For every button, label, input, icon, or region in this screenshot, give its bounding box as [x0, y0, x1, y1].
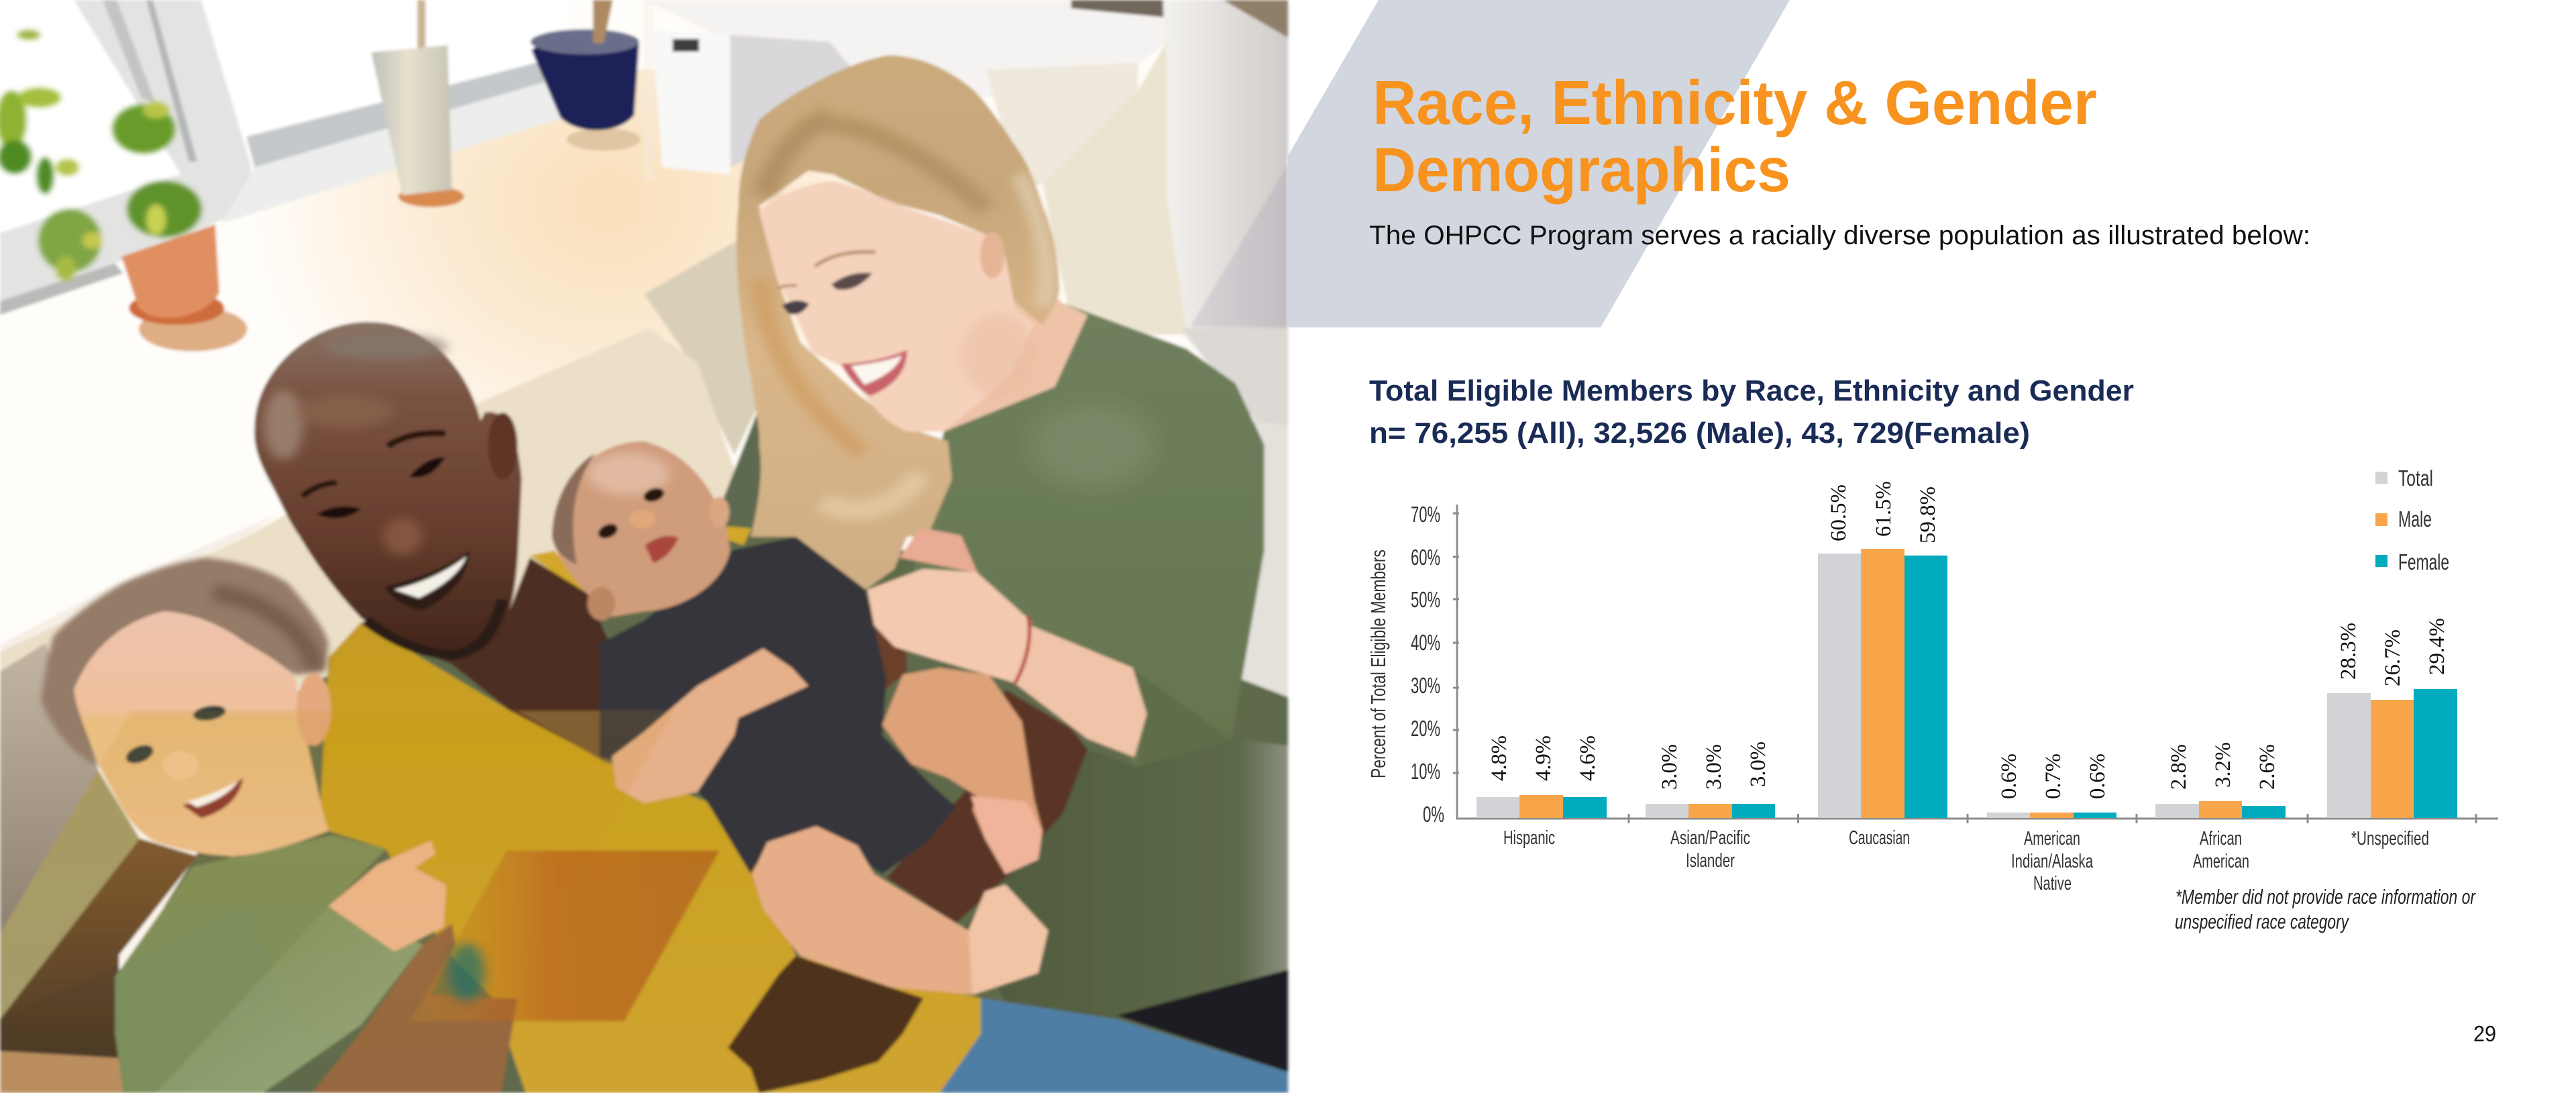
- y axis tick labels: 10%: [1411, 759, 1440, 784]
- footnote: *Member did not provide race information or: [2176, 885, 2476, 908]
- jeans and shadow: [936, 970, 1288, 1093]
- value labels: 4.9%: [1532, 735, 1556, 781]
- man head: [254, 322, 522, 658]
- value labels: 0.6%: [1997, 753, 2021, 799]
- axes and ticks: [1453, 505, 2498, 823]
- window and frame: [0, 0, 575, 315]
- baby arm: [612, 648, 808, 803]
- overlay: orange parallelogram tint: [411, 850, 720, 1021]
- category labels: Hispanic: [1503, 827, 1555, 849]
- value labels: 3.0%: [1702, 744, 1726, 790]
- sofa: [0, 240, 767, 1093]
- photo: family on sofa: [0, 0, 1288, 1093]
- man ear: [488, 413, 517, 480]
- man shirt: [321, 622, 981, 1093]
- baby lower leg: [753, 826, 1048, 995]
- woman eyes and smile: [778, 252, 907, 396]
- man lower hand: [312, 924, 517, 1093]
- value labels: 3.0%: [1746, 741, 1770, 787]
- plant and terracotta pot: [0, 30, 248, 352]
- footnote: [2175, 885, 2476, 933]
- y axis tick labels: 0%: [1423, 802, 1444, 827]
- y axis tick labels: 50%: [1411, 587, 1440, 612]
- value labels: 28.3%: [2337, 623, 2361, 680]
- value labels: 59.8%: [1916, 486, 1940, 543]
- legend: Total: [2398, 466, 2433, 490]
- legend: [2375, 466, 2449, 574]
- woman: [718, 55, 1288, 1019]
- y axis tick labels: 40%: [1411, 630, 1440, 655]
- value labels: 3.0%: [1658, 744, 1682, 790]
- bars: Asian/Pacific Islander: [1646, 804, 1775, 818]
- girl: [41, 558, 446, 1093]
- category labels: *Unspecified: [2351, 828, 2429, 849]
- girl shirt: [115, 835, 423, 1093]
- woman forearm: [1014, 625, 1146, 757]
- girl hair: [41, 558, 329, 767]
- subtitle: The OHPCC Program serves a racially diverse population as illustrated below:: [1369, 221, 2310, 250]
- baby: [552, 441, 1048, 995]
- woman shirt highlight: [1031, 405, 1154, 488]
- metal cylinder vase: [371, 0, 464, 207]
- category labels: African: [2200, 828, 2242, 849]
- man: [254, 322, 1087, 1093]
- baby onesie: [600, 537, 956, 874]
- baby hair edge: [552, 453, 596, 565]
- baby face: [595, 485, 678, 563]
- man neck and chest: [411, 558, 612, 760]
- woman shirt behind hair: [718, 387, 813, 537]
- woman ear: [980, 232, 1005, 278]
- category labels: Islander: [1686, 850, 1735, 872]
- y axis title: Percent of Total Eligible Members: [1366, 550, 1390, 778]
- man forearm: [886, 689, 1087, 924]
- value labels: 4.8%: [1487, 735, 1511, 781]
- title: Demographics: [1373, 135, 1790, 205]
- category labels: Asian/Pacific: [1670, 827, 1750, 849]
- baby forehead highlight: [588, 453, 669, 495]
- value labels: 0.6%: [2086, 753, 2110, 799]
- bars: American Indian/Alaska Native: [1987, 813, 2116, 818]
- navy flower pot: [531, 0, 641, 150]
- woman face: [759, 181, 1034, 431]
- overlay: gold chevron tint: [0, 711, 674, 1093]
- value labels: 60.5%: [1827, 484, 1851, 541]
- chart heading: [1369, 374, 2134, 450]
- baby lower foot: [969, 884, 1048, 995]
- y axis tick labels: 20%: [1411, 716, 1440, 741]
- woman skirt area: [965, 739, 1288, 1019]
- overlay: teal glow: [449, 943, 484, 1002]
- legend: Male: [2398, 507, 2432, 531]
- category labels: [1503, 827, 2429, 894]
- girl neck: [230, 753, 329, 857]
- woman neck: [928, 237, 1087, 431]
- category labels: American: [2193, 851, 2249, 872]
- bars: Unspecified: [2327, 689, 2457, 818]
- footnote: unspecified race category: [2175, 910, 2350, 933]
- woman hair shading: [760, 119, 1046, 511]
- baby upper foot: [971, 796, 1042, 874]
- value labels: 0.7%: [2041, 753, 2065, 799]
- y axis tick labels: 70%: [1411, 502, 1440, 527]
- baby upper leg: [882, 668, 1042, 874]
- girl hand: [329, 841, 446, 951]
- value labels: 4.6%: [1576, 735, 1600, 781]
- white appliance and back wall: [644, 0, 1288, 181]
- woman sleeve cuff: [1133, 669, 1232, 767]
- girl eyes and smile: [122, 703, 243, 819]
- value labels: 61.5%: [1872, 481, 1896, 537]
- shirt shoulder: [530, 551, 592, 596]
- category labels: Native: [2033, 873, 2072, 894]
- man eyes and smile: [303, 433, 502, 656]
- value labels: 26.7%: [2381, 629, 2405, 686]
- value labels: [1487, 481, 2449, 799]
- woman neck shade: [961, 314, 1035, 397]
- girl sleeve: [156, 906, 423, 1093]
- grey parallelogram behind title: [1288, 0, 1790, 327]
- y axis tick labels: [1411, 502, 1444, 827]
- dark gap behind hand: [862, 593, 907, 693]
- woman shirt: [904, 303, 1265, 767]
- value labels: 2.8%: [2167, 744, 2191, 790]
- man forehead highlights: [264, 335, 447, 555]
- value labels: 2.6%: [2255, 744, 2279, 790]
- chart heading: Total Eligible Members by Race, Ethnicity and Gender: [1369, 374, 2134, 407]
- woman hair: [737, 55, 1059, 590]
- bars: Hispanic: [1477, 795, 1607, 818]
- chart heading: n= 76,255 (All), 32,526 (Male), 43, 729(Female): [1369, 417, 2030, 450]
- bars: African American: [2155, 801, 2286, 818]
- overlay: grey band over photo: [1190, 164, 1288, 327]
- value labels: 29.4%: [2425, 618, 2449, 675]
- title: Race, Ethnicity & Gender: [1373, 68, 2097, 138]
- man hand: [728, 955, 923, 1093]
- woman hand and bracelet: [867, 527, 1032, 683]
- title: [1373, 68, 2097, 205]
- baby head: [552, 441, 731, 617]
- bars: Caucasian: [1818, 549, 1947, 818]
- girl hair dark inner: [213, 592, 316, 669]
- category labels: Indian/Alaska: [2011, 851, 2094, 872]
- chest tinted band: [517, 711, 608, 764]
- category labels: American: [2024, 828, 2080, 849]
- girl face: [74, 611, 329, 856]
- figure base fill: [123, 488, 1288, 1093]
- y axis tick labels: 60%: [1411, 545, 1440, 570]
- legend: Female: [2398, 550, 2449, 574]
- bar chart: [1366, 466, 2498, 894]
- cushions and curtain: [985, 0, 1288, 749]
- baby ears: [588, 497, 729, 621]
- y axis tick labels: 30%: [1411, 673, 1440, 698]
- girl ear: [297, 674, 331, 746]
- value labels: 3.2%: [2211, 742, 2235, 788]
- category labels: Caucasian: [1849, 827, 1910, 849]
- page number: 29: [2473, 1021, 2496, 1046]
